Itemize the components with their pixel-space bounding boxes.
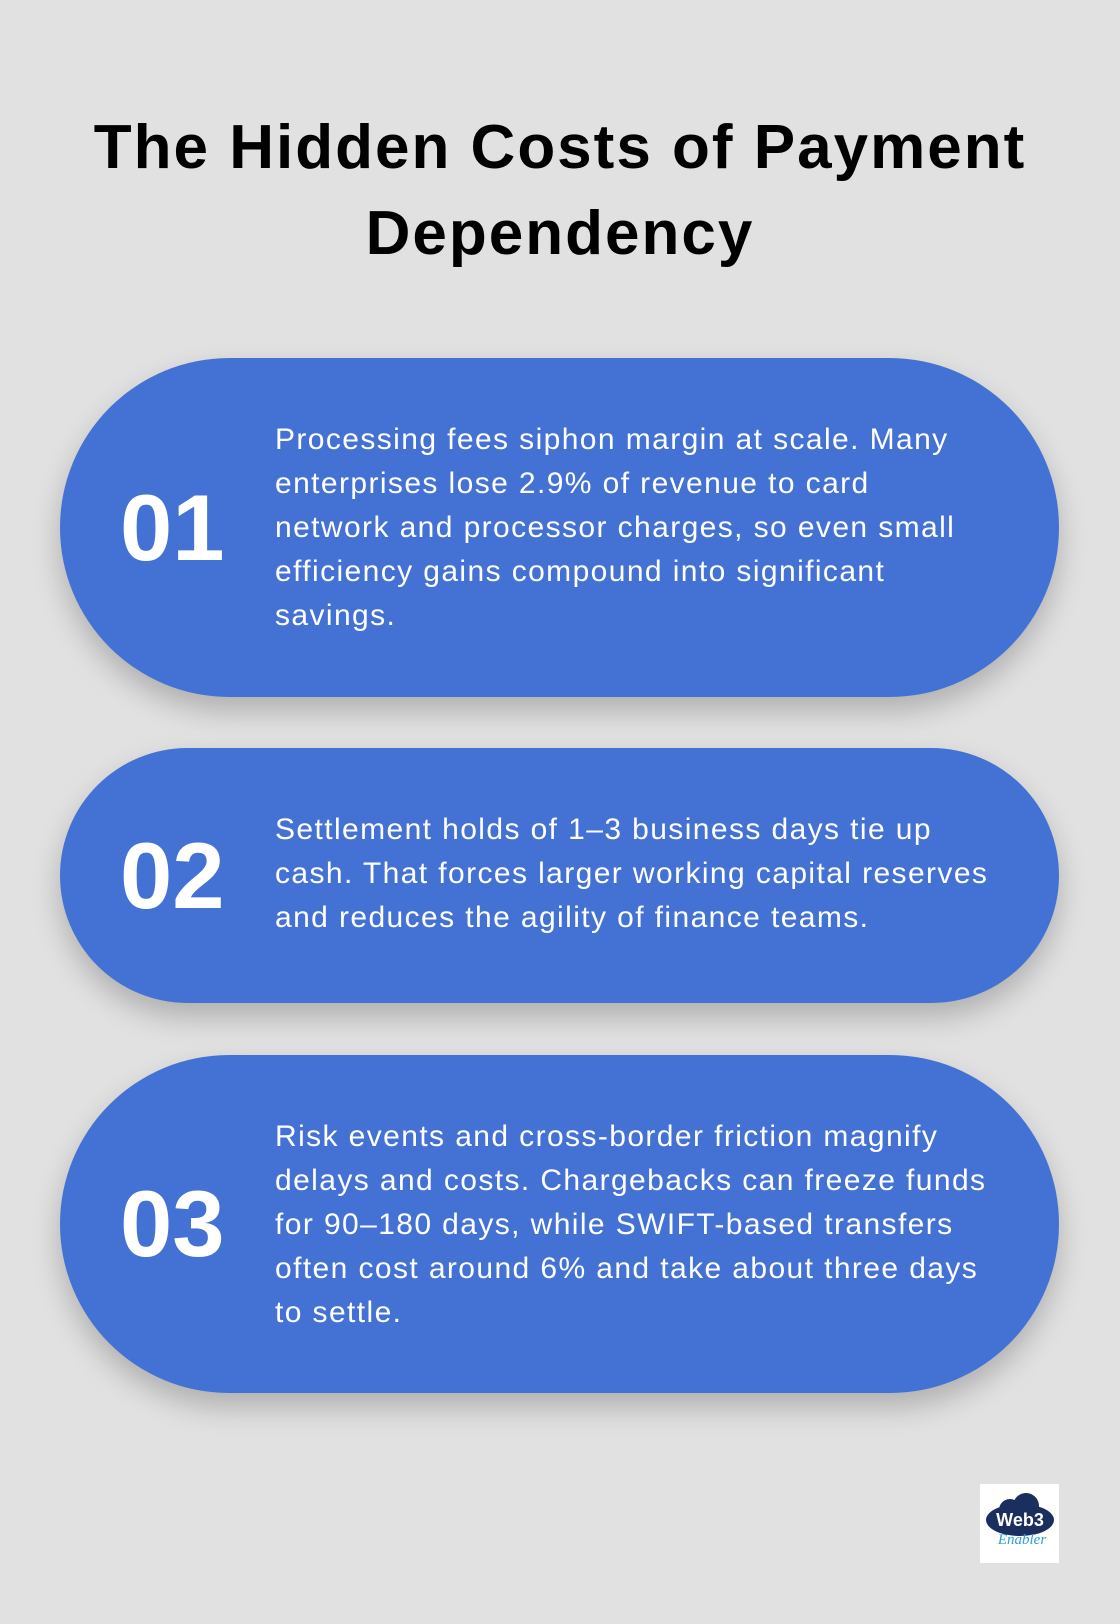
- icon: cloud: Web3: [996, 1510, 1044, 1530]
- text 02: Settlement holds of 1–3 business days tie up: [275, 813, 932, 846]
- number 01: 01: [120, 475, 225, 580]
- text 03: for 90–180 days, while SWIFT-based transfers: [275, 1208, 954, 1241]
- panel: 03: [60, 1055, 1059, 1393]
- text 02: cash. That forces larger working capital reserves: [275, 857, 988, 890]
- text 02: and reduces the agility of finance teams.: [275, 901, 869, 934]
- text 01: Processing fees siphon margin at scale. Many: [275, 423, 949, 456]
- number 03: 03: [120, 1171, 225, 1276]
- panel: 01: [60, 358, 1059, 697]
- icon: cloud: [986, 1493, 1054, 1548]
- title: The Hidden Costs of Payment: [94, 113, 1026, 182]
- title: Dependency: [366, 199, 754, 268]
- text 01: efficiency gains compound into significant: [275, 555, 885, 588]
- panel: 02: [60, 748, 1059, 1003]
- text 01: network and processor charges, so even small: [275, 511, 955, 544]
- text 03: [275, 1120, 986, 1329]
- logo: [980, 1484, 1059, 1563]
- text 03: Risk events and cross-border friction magnify: [275, 1120, 938, 1153]
- text 01: [275, 423, 955, 632]
- text 02: [275, 813, 988, 934]
- text 03: to settle.: [275, 1296, 402, 1329]
- title: [94, 113, 1026, 268]
- text 03: delays and costs. Chargebacks can freeze funds: [275, 1164, 986, 1197]
- number 02: 02: [120, 823, 225, 928]
- text 03: often cost around 6% and take about three days: [275, 1252, 978, 1285]
- text 01: savings.: [275, 599, 396, 632]
- text 01: enterprises lose 2.9% of revenue to card: [275, 467, 870, 500]
- icon: cloud: Enabler: [997, 1532, 1046, 1548]
